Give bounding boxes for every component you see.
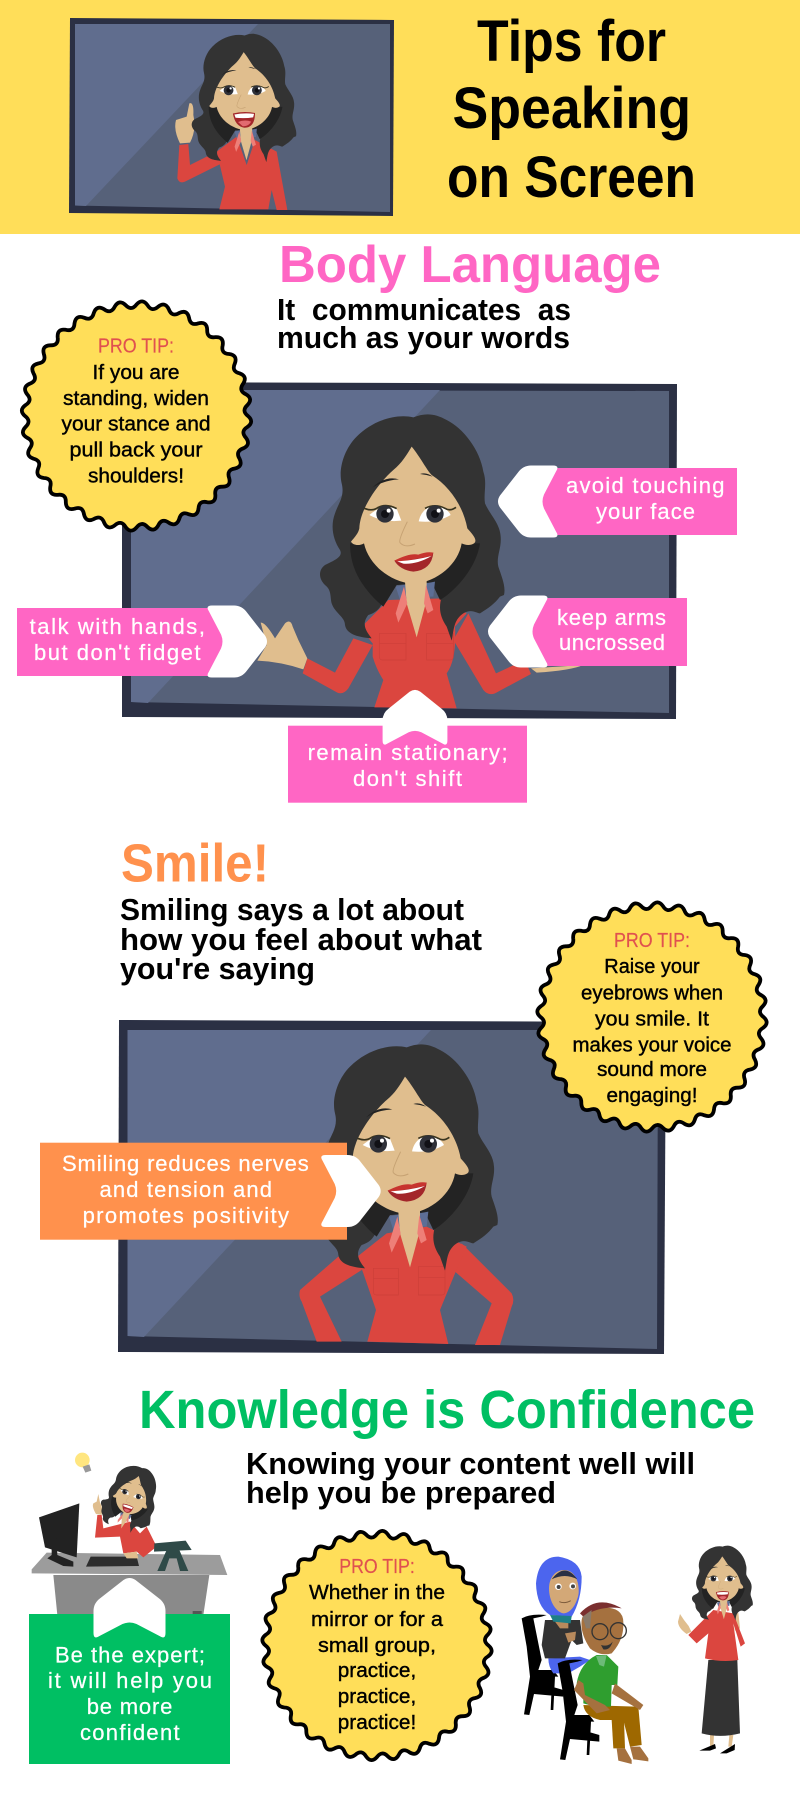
subheading: body language: much as your words — [277, 320, 570, 355]
subheading: body language — [277, 292, 571, 355]
pro tip burst: practice: practice, — [338, 1685, 416, 1708]
presenter hands on hips — [299, 1044, 513, 1345]
seated audience and standing presenter — [522, 1546, 753, 1764]
section: knowledge is confidence — [29, 1380, 755, 1764]
callout: talk with hands: talk with hands, — [30, 614, 205, 639]
pro tip burst: practice: small group, — [318, 1634, 436, 1657]
pro tip burst: practice: mirror or for a — [311, 1608, 444, 1631]
presenter pointing — [175, 34, 296, 210]
callout: talk with hands: but don't fidget — [34, 640, 200, 665]
pro tip burst: stance: PRO TIP: — [98, 335, 174, 358]
pro tip burst: stance: shoulders! — [88, 465, 184, 488]
subheading: knowledge: Knowing your content well will — [246, 1446, 695, 1481]
callout: remain stationary — [288, 690, 527, 803]
heading: knowledge is confidence: Knowledge is Confidence — [139, 1380, 755, 1440]
pro tip burst: eyebrows: eyebrows when — [581, 981, 723, 1004]
subheading: knowledge: help you be prepared — [246, 1475, 556, 1510]
callout: smiling reduces nerves — [40, 1143, 381, 1240]
pro tip burst: practice: practice, — [338, 1659, 416, 1682]
pro tip burst: eyebrows — [537, 902, 767, 1132]
callout: avoid touching your face: avoid touching — [566, 473, 724, 498]
pro tip burst: practice: practice! — [338, 1711, 416, 1734]
presenter at desk with computer and lightbulb — [32, 1453, 227, 1615]
pro tip burst: eyebrows: engaging! — [606, 1084, 698, 1107]
pro tip burst: practice — [262, 1531, 492, 1760]
callout: smiling reduces nerves: promotes positivity — [83, 1203, 289, 1228]
pro tip burst: stance — [22, 301, 251, 531]
seated woman in blue hijab on chair — [522, 1557, 590, 1715]
pro tip burst: stance: If you are — [92, 361, 180, 384]
callout: smiling reduces nerves: Smiling reduces nerves — [62, 1151, 309, 1176]
pro tip burst: eyebrows: sound more — [597, 1058, 707, 1081]
screen with pointing presenter — [69, 18, 394, 216]
screen with smiling presenter — [118, 1020, 666, 1354]
subheading: smile: Smiling says a lot about — [120, 892, 464, 927]
subheading: smile: how you feel about what — [120, 922, 482, 957]
callout: avoid touching your face — [498, 466, 737, 538]
pro tip burst: eyebrows: Raise your — [604, 955, 700, 978]
callout: talk with hands — [17, 606, 267, 678]
pro tip burst: stance: your stance and — [62, 413, 211, 436]
callout: be the expert: it will help you — [48, 1668, 212, 1693]
callout: keep arms uncrossed — [488, 596, 687, 668]
callout: smiling reduces nerves: and tension and — [100, 1177, 272, 1202]
heading: smile: Smile! — [121, 834, 269, 894]
callout: keep arms uncrossed: uncrossed — [559, 630, 665, 655]
pro tip burst: stance: pull back your — [70, 439, 203, 462]
pro tip burst: eyebrows: PRO TIP: — [614, 929, 690, 952]
callout: be the expert: confident — [80, 1720, 180, 1745]
screen with presenter, hands open — [122, 382, 677, 719]
callout: be the expert — [29, 1578, 230, 1764]
subheading: knowledge — [246, 1446, 695, 1510]
subheading: smile: you're saying — [120, 951, 315, 986]
title: Tips for — [477, 9, 666, 74]
title: on Screen — [447, 145, 696, 210]
callout: be the expert: be more — [87, 1694, 172, 1719]
pro tip burst: stance: standing, widen — [63, 387, 209, 410]
callout: remain stationary: don't shift — [353, 766, 462, 791]
standing woman presenting — [678, 1546, 753, 1753]
icon: lightbulb — [75, 1453, 91, 1473]
callout: be the expert: Be the expert; — [55, 1643, 205, 1668]
callout: remain stationary: remain stationary; — [308, 740, 508, 765]
pro tip burst: eyebrows: you smile. It — [595, 1008, 709, 1031]
header banner — [0, 0, 800, 234]
title — [447, 9, 696, 210]
heading: body language: Body Language — [279, 236, 661, 294]
pro tip burst: practice: PRO TIP: — [339, 1555, 415, 1578]
subheading: smile — [120, 892, 482, 986]
seated man in green shirt on chair — [558, 1602, 648, 1764]
title: Speaking — [452, 76, 691, 141]
presenter hands open — [257, 414, 583, 708]
subheading: body language: It communicates as — [277, 292, 571, 327]
pro tip burst: practice: Whether in the — [309, 1581, 445, 1604]
callout: keep arms uncrossed: keep arms — [557, 605, 666, 630]
section: smile — [40, 834, 767, 1354]
section: body language — [17, 236, 737, 803]
pro tip burst: eyebrows: makes your voice — [572, 1033, 732, 1056]
callout: avoid touching your face: your face — [596, 499, 695, 524]
